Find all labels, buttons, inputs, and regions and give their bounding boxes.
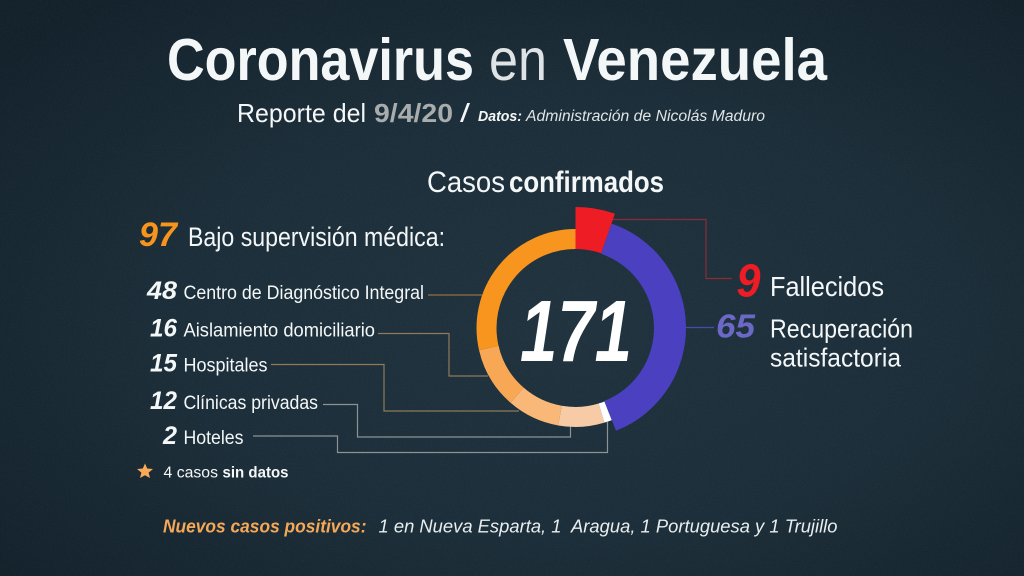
segment: hoteles: [602, 411, 608, 413]
label: aislamiento domiciliario: 16: [150, 314, 178, 342]
label: hospitales: Hospitales: [184, 356, 268, 376]
connector lines: [253, 220, 732, 452]
label: recuperacion satisfactoria: satisfactoria: [770, 342, 901, 372]
title: Venezuela: [563, 27, 828, 93]
note: casos sin datos: [164, 464, 288, 482]
icon: asterisk: [137, 464, 153, 478]
heading: casos confirmados: confirmados: [509, 166, 664, 199]
label: recuperacion satisfactoria: [716, 308, 913, 372]
segment: fallecidos: [576, 207, 615, 253]
subtitle: report date and source: /: [460, 98, 471, 128]
label: hoteles: [162, 422, 244, 450]
label: hoteles: 2: [162, 422, 177, 450]
segment: clinicas privadas: [560, 413, 602, 417]
label: fallecidos: Fallecidos: [770, 271, 884, 302]
subtitle: report date and source: Administración de Nicolás Maduro: [525, 108, 765, 125]
note: casos sin datos: sin datos: [222, 464, 288, 482]
heading: casos confirmados: [427, 166, 664, 199]
label: hospitales: 15: [150, 350, 178, 378]
label: fallecidos: [736, 254, 884, 306]
title: en: [489, 27, 547, 93]
label: centro de diagnostico integral: [146, 277, 424, 305]
label: recuperacion satisfactoria: Recuperación: [770, 314, 913, 344]
footer: nuevos casos positivos: 1 en Nueva Esparta, 1 Aragua, 1 Portuguesa y 1 Trujillo: [378, 516, 838, 536]
note: casos sin datos: 4 casos: [164, 464, 218, 482]
segment: aislamiento domiciliario: [489, 348, 517, 395]
segment: centro de diagnostico: [487, 239, 576, 348]
label: bajo supervision medica: Bajo supervisión médica:: [188, 222, 445, 252]
label: aislamiento domiciliario: Aislamiento domiciliario: [184, 320, 375, 342]
label: clinicas privadas: 12: [150, 387, 177, 415]
subtitle: report date and source: 9/4/20: [374, 98, 453, 128]
total: 171: [520, 283, 632, 380]
subtitle: report date and source: [237, 98, 765, 128]
label: centro de diagnostico integral: Centro de Diagnóstico Integral: [184, 283, 424, 304]
title: Coronavirus: [167, 27, 474, 93]
donut chart: [487, 207, 686, 431]
label: bajo supervision medica: [139, 216, 445, 254]
segment: hospitales: [517, 395, 560, 416]
heading: casos confirmados: Casos: [427, 166, 505, 199]
footer: nuevos casos positivos: Nuevos casos positivos:: [163, 516, 366, 536]
subtitle: report date and source: Reporte del: [237, 98, 366, 128]
label: hospitales: [150, 350, 268, 378]
label: clinicas privadas: Clínicas privadas: [184, 393, 318, 414]
label: aislamiento domiciliario: [150, 314, 375, 342]
footer: nuevos casos positivos: [163, 516, 838, 536]
label: recuperacion satisfactoria: 65: [716, 308, 756, 344]
label: fallecidos: 9: [736, 254, 761, 306]
label: bajo supervision medica: 97: [139, 216, 179, 254]
title: [167, 27, 828, 93]
subtitle: report date and source: Datos:: [478, 108, 522, 125]
label: hoteles: Hoteles: [184, 428, 244, 449]
label: centro de diagnostico integral: 48: [146, 277, 177, 305]
segment: recuperados: [601, 224, 686, 431]
label: clinicas privadas: [150, 387, 318, 415]
